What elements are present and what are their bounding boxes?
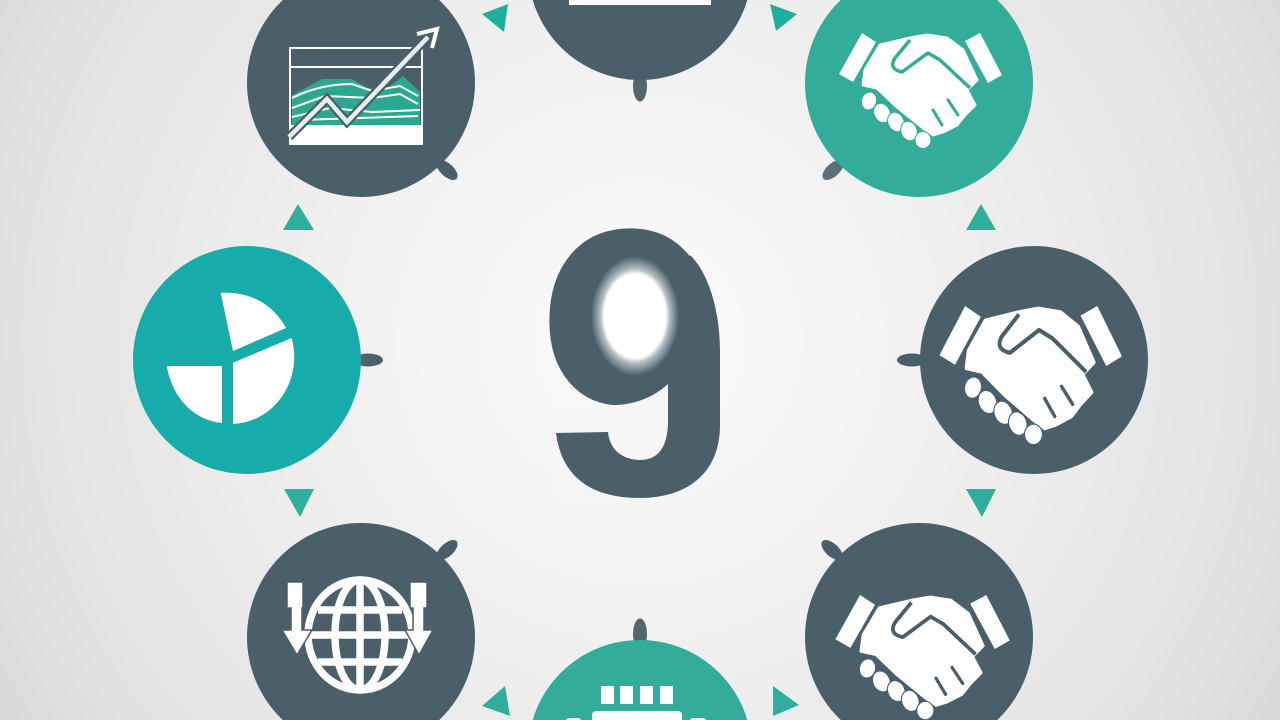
node: bottom centre — [528, 618, 752, 720]
arrow: upper right — [966, 204, 996, 230]
connector tick — [897, 354, 927, 366]
icon: growth chart — [289, 29, 437, 145]
glowing counter of the 9 — [591, 256, 679, 376]
connector tick — [433, 156, 461, 184]
node: bottom right, handshake — [805, 523, 1033, 720]
node: top centre — [528, 0, 752, 102]
arrow: bottom left of centre — [482, 686, 510, 716]
arrow: top left of centre — [482, 4, 508, 32]
arrow: lower right — [966, 489, 996, 517]
icon: globe with arrows — [282, 578, 433, 692]
node: bottom left, globe — [247, 523, 475, 720]
connector tick — [819, 156, 847, 184]
node: right, handshake — [897, 246, 1148, 474]
connector tick — [353, 354, 383, 366]
icon: handshake — [835, 595, 1010, 720]
icon: bottom centre blocks — [566, 686, 706, 720]
icon: handshake — [839, 33, 1002, 148]
growth arrow — [289, 37, 428, 137]
icon: pie chart — [167, 293, 294, 424]
arrow: upper left — [283, 204, 314, 230]
central number 9: 9 — [534, 161, 736, 578]
arrow: lower left — [284, 489, 314, 517]
node: left, pie chart — [133, 246, 383, 474]
node: top left, line chart — [247, 0, 475, 197]
connector tick — [818, 536, 846, 564]
connector tick — [433, 536, 461, 564]
arrow: bottom right of centre — [773, 686, 799, 716]
arrow: top right of centre — [770, 4, 797, 31]
node: top right, handshake — [805, 0, 1033, 197]
icon: top centre bar — [569, 0, 711, 5]
icon: handshake — [939, 306, 1122, 445]
